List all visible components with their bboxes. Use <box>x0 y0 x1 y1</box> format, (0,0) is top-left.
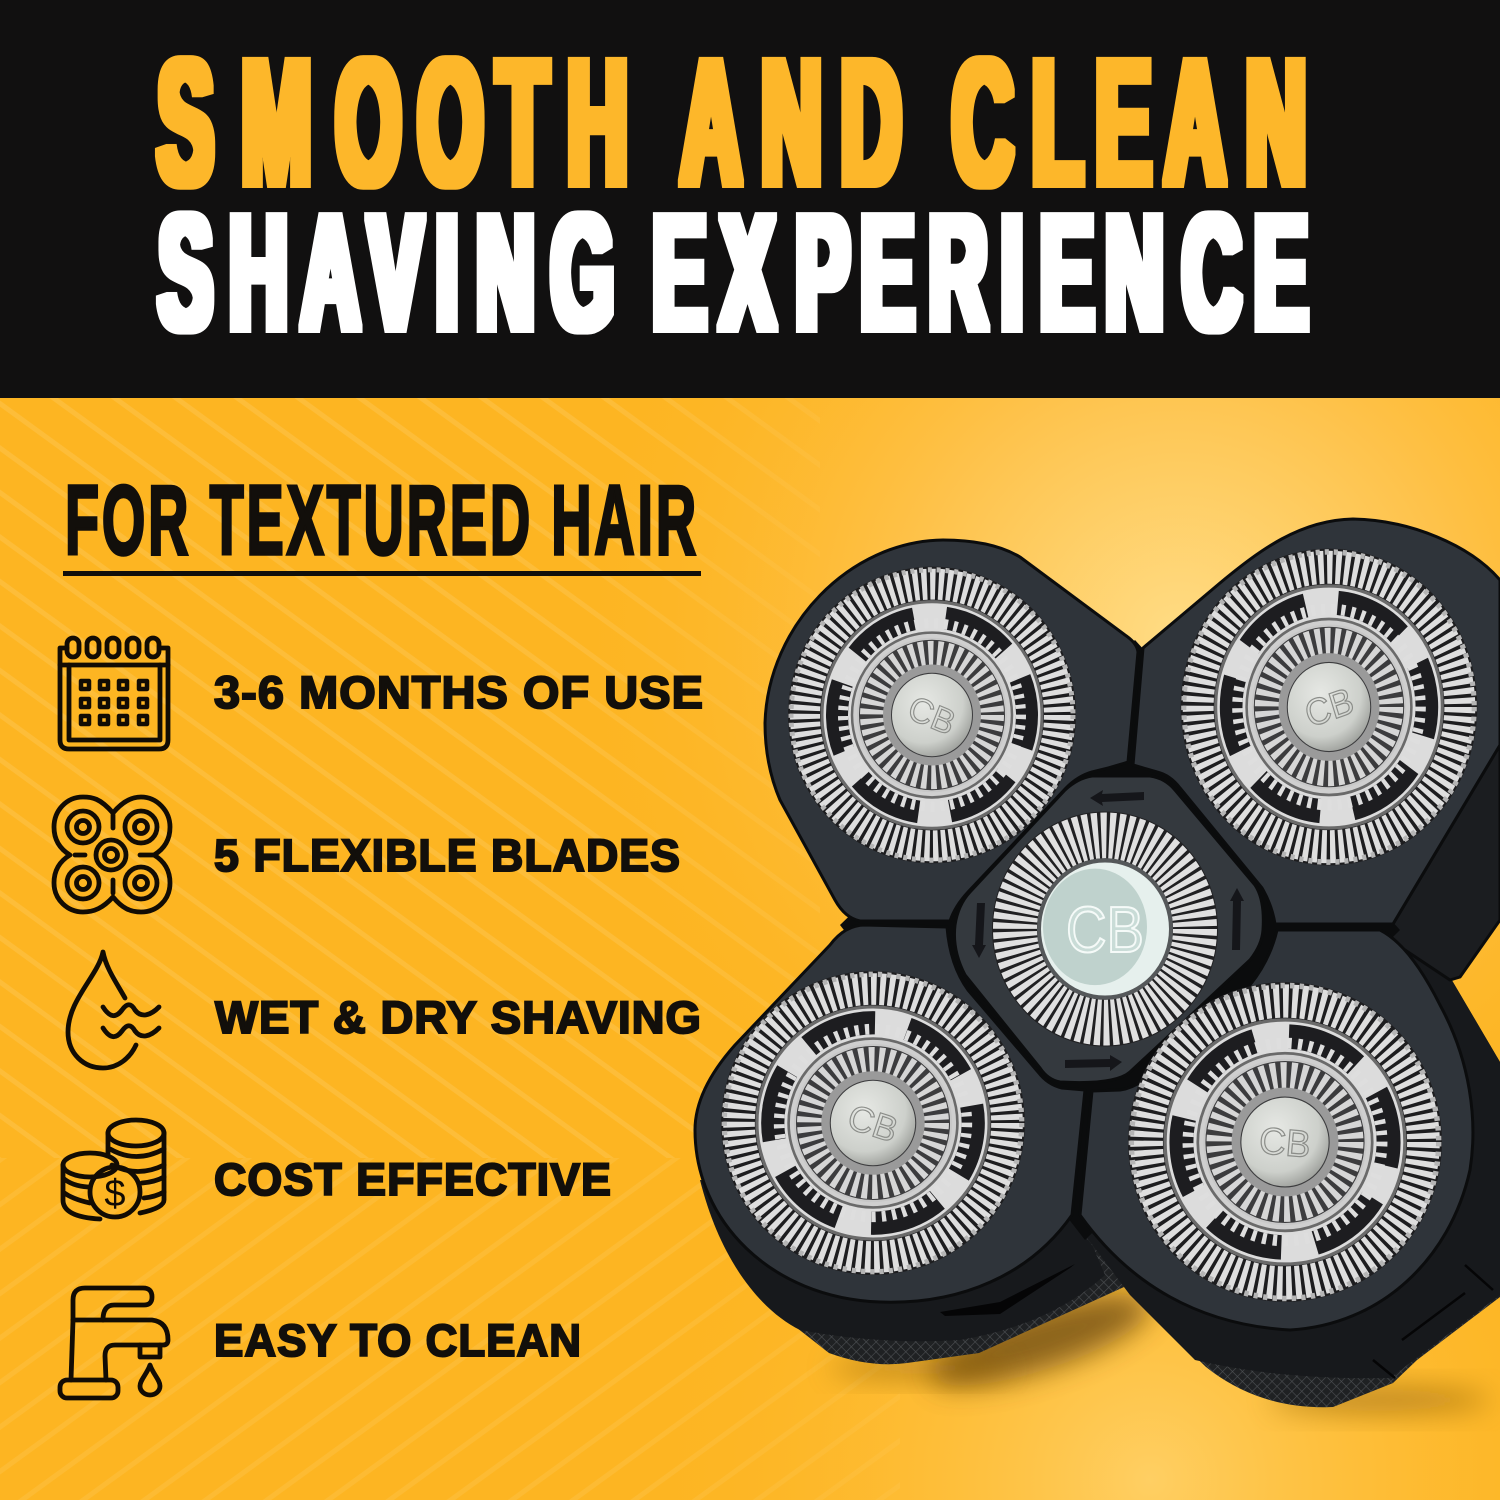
heading: for textured hair: FOR TEXTURED HAIR <box>65 465 699 575</box>
feature text: wet and dry shaving: WET & DRY SHAVING <box>215 992 702 1043</box>
title line 2: SHAVING EXPERIENCE <box>158 182 1308 365</box>
lobe skirt: top right <box>1378 745 1500 980</box>
lobe skirt: bottom right <box>1067 930 1500 1407</box>
lobe: bottom right body <box>1080 930 1473 1330</box>
lobe skirt: bottom left <box>697 1150 1124 1364</box>
blade: top left: CB <box>903 689 960 743</box>
icon: calendar <box>60 638 168 749</box>
feature text: months of use: 3-6 MONTHS OF USE <box>214 667 704 718</box>
title line 1: SMOOTH AND CLEAN <box>158 21 1306 222</box>
blade: center: CB <box>1066 895 1144 966</box>
icon: coin stacks: $ <box>104 1173 126 1215</box>
icon: five blades <box>54 797 170 912</box>
panel: yellow background <box>0 398 1500 1500</box>
title <box>158 21 1308 365</box>
blade: bottom right: CB <box>1258 1119 1312 1166</box>
feature text: cost effective: COST EFFECTIVE <box>214 1154 612 1205</box>
feature text: flexible blades: 5 FLEXIBLE BLADES <box>214 830 681 881</box>
center hub body <box>954 776 1263 1083</box>
shadows under shaver <box>830 1276 1490 1412</box>
lobe: top right body <box>1133 519 1500 924</box>
icon: water drop with waves <box>68 952 159 1068</box>
blade: bottom right <box>1128 982 1442 1302</box>
icon: coin stacks <box>63 1120 164 1219</box>
rotation arrows <box>972 790 1244 1071</box>
heading: for textured hair <box>63 465 701 576</box>
blade: center <box>992 811 1218 1047</box>
product: five-blade shaver head <box>695 519 1500 1412</box>
blade: top right: CB <box>1300 679 1358 735</box>
feature text: easy to clean: EASY TO CLEAN <box>214 1315 582 1366</box>
lobe: top left body <box>765 540 1138 921</box>
lobe: bottom left body <box>695 925 1085 1302</box>
panel: black title band <box>0 0 1500 398</box>
icon: faucet <box>60 1288 168 1398</box>
gap backing <box>840 640 1400 1240</box>
blade: top left <box>788 567 1076 863</box>
blade: bottom left <box>721 971 1025 1275</box>
blade: top right <box>1181 549 1477 865</box>
blade: bottom left: CB <box>843 1097 903 1150</box>
